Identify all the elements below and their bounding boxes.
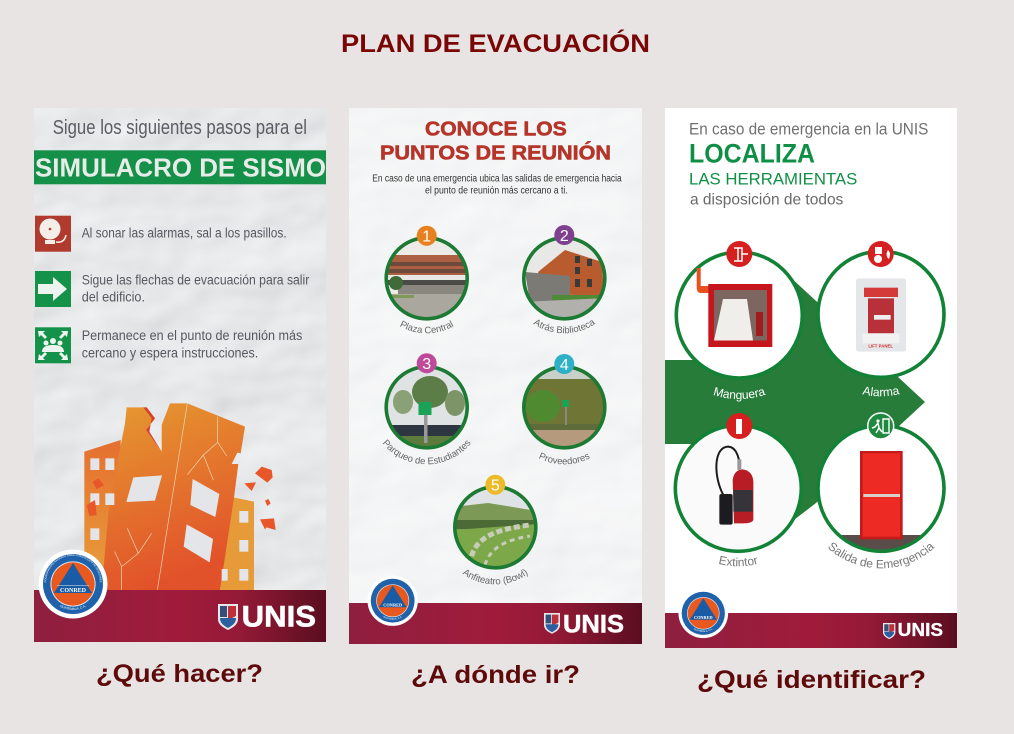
logo: UNIS: UNIS [242, 601, 316, 634]
logo: CONRED: COORDINADORA NACIONAL PARA LA REDUCCIÓN DE DESASTRES [44, 554, 102, 582]
point 2: atrás biblioteca: 2 [560, 228, 569, 245]
point 4: proveedores [522, 354, 607, 464]
tool: manguera: Manguera [714, 387, 766, 402]
point 1: plaza central [384, 226, 469, 334]
intro text [372, 174, 622, 196]
illustration: collapsing building [84, 403, 276, 590]
point 5: anfiteatro: Anfiteatro (Bowl) [462, 569, 528, 586]
logo: CONRED: CONRED [60, 588, 87, 594]
panel: qué identificar [665, 108, 957, 648]
heading: puntos de reunión: CONOCE LOS [425, 119, 567, 141]
point 5: anfiteatro: 5 [491, 478, 500, 494]
step 1 text: Al sonar las alarmas, sal a los pasillos. [82, 226, 287, 241]
logo: CONRED: GUATEMALA, C.A. [60, 605, 86, 610]
point 3: parqueo de estudiantes: 3 [422, 356, 431, 373]
footer bar [34, 590, 326, 642]
icon: alarm bell [35, 216, 71, 252]
heading block [689, 120, 928, 208]
point 2: atrás biblioteca: Atrás Biblioteca [533, 320, 596, 334]
title: PLAN DE EVACUACIÓN [341, 28, 650, 58]
icon: exit arrow [35, 271, 71, 307]
step 3 text [82, 328, 303, 361]
heading band: simulacro de sismo: SIMULACRO DE SISMO [35, 153, 326, 183]
step 2 text: del edificio. [82, 290, 145, 305]
logo: CONRED: CONRED [383, 603, 402, 608]
tool: alarma: Alarma [862, 386, 900, 396]
point 3: parqueo de estudiantes [382, 353, 470, 464]
step 2 text: Sigue las flechas de evacuación para salir [82, 272, 310, 287]
panel: a dónde ir [349, 108, 642, 644]
logo: UNIS: UNIS [898, 620, 943, 640]
logo: CONRED: GUATEMALA, C.A. [694, 628, 713, 632]
panel: qué hacer [34, 108, 326, 642]
logo: CONRED [678, 592, 728, 638]
tool: extintor [674, 413, 803, 566]
heading: puntos de reunión: PUNTOS DE REUNIÓN [380, 140, 611, 164]
logo: CONRED: GUATEMALA, C.A. [384, 616, 402, 620]
heading block: LAS HERRAMIENTAS [689, 169, 857, 188]
heading: puntos de reunión [380, 119, 611, 164]
caption: a dónde ir: ¿A dónde ir? [411, 661, 580, 689]
logo: CONRED [368, 576, 418, 626]
point 2: atrás biblioteca [522, 225, 607, 334]
heading block: En caso de emergencia en la UNIS [689, 120, 928, 138]
step 3 text: cercano y espera instrucciones. [82, 346, 258, 361]
caption: qué identificar: ¿Qué identificar? [697, 666, 926, 694]
tool: manguera [674, 241, 804, 402]
heading block: LOCALIZA [689, 138, 815, 168]
point 5: anfiteatro [453, 474, 538, 586]
footer bar [665, 613, 957, 648]
tool: salida de emergencia: Salida de Emergencia [828, 542, 935, 568]
heading: pasos: Sigue los siguientes pasos para el [53, 117, 307, 139]
point 1: plaza central: 1 [422, 228, 431, 246]
logo: CONRED: CONRED [694, 615, 713, 620]
heading block: a disposición de todos [690, 191, 843, 208]
step 3 text: Permanece en el punto de reunión más [82, 328, 303, 343]
caption: qué hacer: ¿Qué hacer? [96, 660, 263, 688]
icon: assembly point [35, 327, 71, 363]
point 1: plaza central: Plaza Central [400, 320, 454, 334]
photo: hose cabinet [697, 268, 772, 347]
intro text: En caso de una emergencia ubica las salidas de emergencia hacia [372, 174, 622, 185]
tool: alarma: LIFT PANEL [868, 343, 893, 348]
point 4: proveedores: Proveedores [539, 452, 590, 464]
tool: salida de emergencia [816, 412, 946, 568]
tool: extintor: Extintor [719, 556, 757, 566]
arrow: green background [665, 275, 925, 523]
point 3: parqueo de estudiantes: Parqueo de Estudiantes [382, 439, 470, 464]
logo: CONRED [38, 550, 108, 618]
footer bar [349, 603, 642, 644]
logo: UNIS: UNIS [563, 610, 624, 638]
point 4: proveedores: 4 [560, 357, 569, 374]
tool: alarma [816, 241, 946, 396]
step 2 text [82, 272, 310, 305]
intro text: el punto de reunión más cercano a ti. [425, 185, 568, 196]
